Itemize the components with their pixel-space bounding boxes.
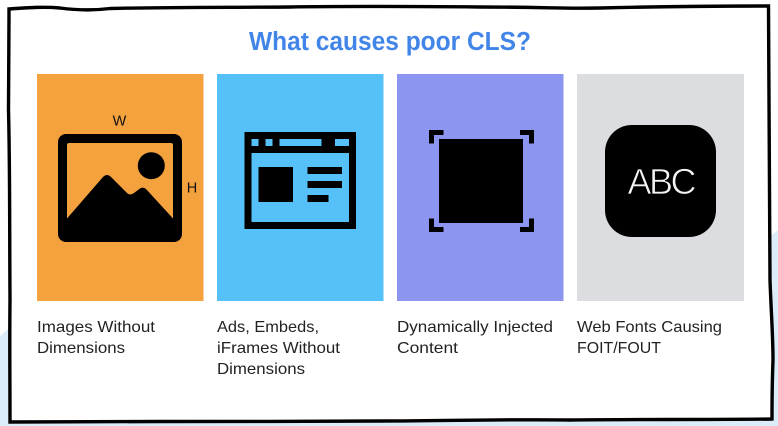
caption: dynamic content: Content: [397, 340, 459, 357]
title: What causes poor CLS?: [249, 28, 531, 56]
caption: images: [37, 319, 156, 357]
caption: ads: iFrames Without: [217, 340, 341, 357]
caption: ads: Dimensions: [217, 361, 305, 378]
caption: images: Images Without: [37, 319, 156, 336]
panel: dynamically injected content: [397, 74, 564, 301]
label: H: H: [187, 180, 197, 196]
icon: ABC rounded square: [605, 125, 716, 237]
icon: selected square: [432, 132, 532, 230]
caption: web fonts: [577, 319, 722, 357]
panel: images without dimensions: [37, 74, 204, 301]
icon: browser window: [244, 132, 356, 229]
caption: ads: [217, 319, 341, 378]
panel: ads and embeds: [217, 74, 384, 301]
caption: images: Dimensions: [37, 340, 125, 357]
caption: dynamic content: Dynamically Injected: [397, 319, 553, 336]
caption: dynamic content: [397, 319, 553, 357]
icon: ABC rounded square: ABC: [628, 161, 696, 202]
caption: ads: Ads, Embeds,: [217, 319, 319, 336]
caption: web fonts: FOIT/FOUT: [577, 340, 661, 357]
label: W: W: [113, 114, 127, 130]
icon: picture: [58, 134, 182, 242]
caption: web fonts: Web Fonts Causing: [577, 319, 722, 336]
panel: web fonts: [577, 74, 744, 301]
